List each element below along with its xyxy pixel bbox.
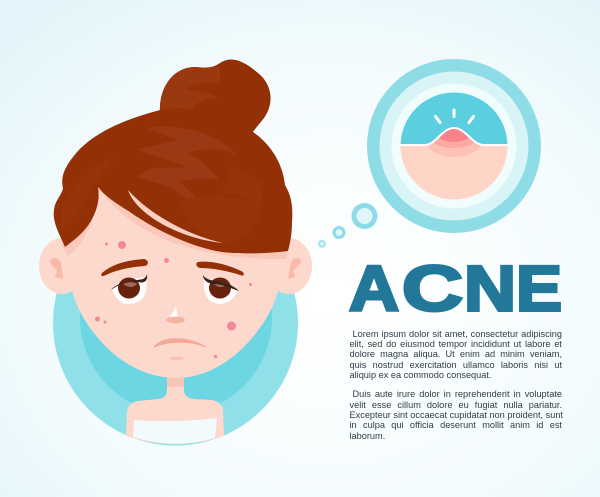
left eyebrow [101,259,148,276]
first paragraph: elit, sed do eiusmod tempor incididunt ut labore et [350,339,562,349]
right ear [266,238,312,294]
face [68,175,283,378]
title: C [402,252,463,324]
neck and shoulders [126,370,224,444]
title: N [464,252,516,324]
body text [350,328,563,441]
mouth [154,339,206,347]
hair shadow on forehead [62,190,289,259]
hair highlights [137,126,238,212]
first paragraph: aliquip ex ea commodo consequat. [350,370,492,380]
first paragraph: Lorem ipsum dolor sit amet, consectetur adipiscing [352,328,562,338]
second paragraph: Duis aute irure dolor in reprehenderit in voluptate [352,389,562,399]
dome cross-section [400,92,508,200]
magnified pimple [367,59,541,233]
nose [166,306,185,323]
thought bubbles [318,203,378,248]
title: E [516,252,562,324]
first paragraph: dolore magna aliqua. Ut enim ad minim veniam, [350,349,562,359]
title: A [349,252,399,324]
second paragraph: laborum. [350,431,385,441]
neck shadow [167,374,184,387]
hair bun [160,60,271,133]
right eyebrow [196,262,244,276]
woman with acne [39,60,312,444]
hair shine [128,190,223,243]
blue circle backdrop [53,290,298,446]
white top [133,418,217,444]
second paragraph [350,389,563,441]
second paragraph: Excepteur sint occaecat cupidatat non proident, sunt [350,410,563,420]
hair main [54,108,292,253]
second paragraph: velit esse cillum dolore eu fugiat nulla pariatur. [350,400,562,410]
first paragraph: quis nostrud exercitation ullamco laboris nisi ut [350,360,562,370]
left eye [111,274,147,304]
right eye [203,275,239,304]
second paragraph: in culpa qui officia deserunt mollit anim id est [350,420,562,430]
rays [436,110,474,122]
first paragraph [350,328,562,380]
left ear [39,238,85,294]
pimples [95,241,252,358]
title [349,252,562,324]
lower lip shadow [170,356,184,360]
